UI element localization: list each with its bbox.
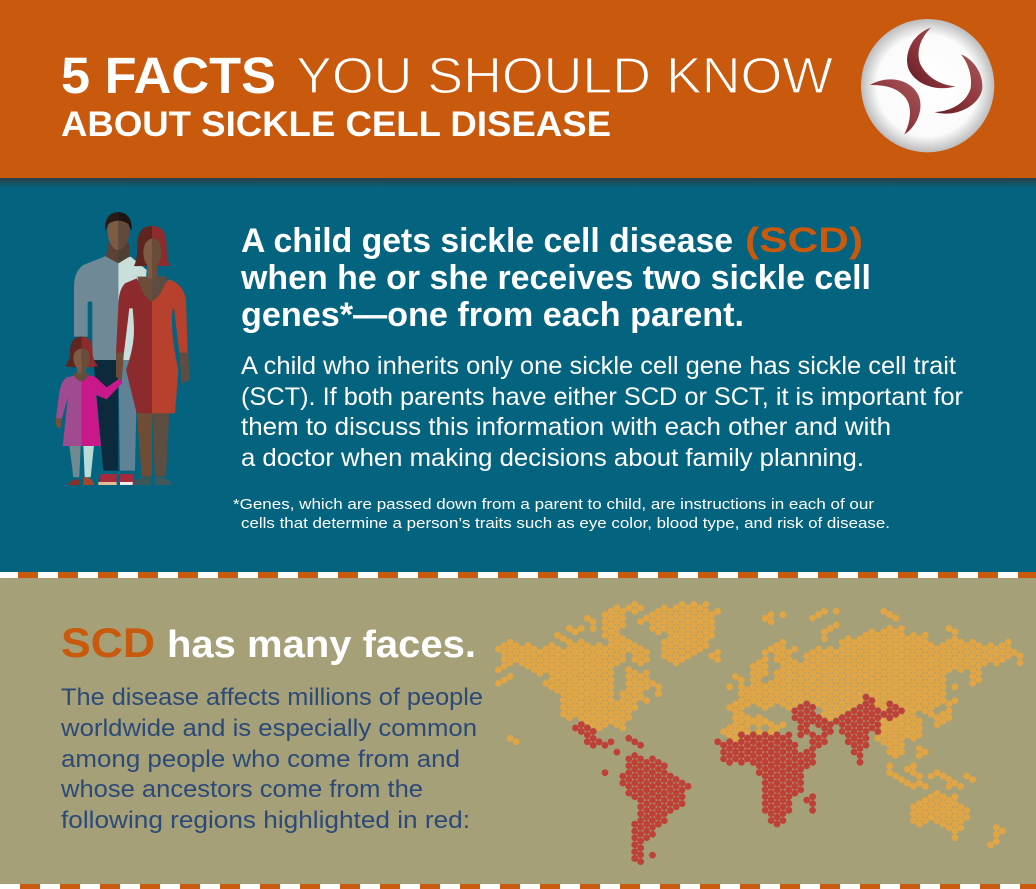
heading: how a child gets SCD: A child gets sickle cell disease — [241, 222, 733, 260]
heading: how a child gets SCD: genes*—one from each parent. — [241, 296, 744, 334]
heading: how a child gets SCD — [240, 221, 871, 334]
man torso — [74, 256, 118, 360]
title: 5 facts you should know: YOU SHOULD KNOW — [296, 47, 833, 104]
heading: SCD has many faces: SCD — [61, 619, 155, 666]
heading: SCD has many faces: has many faces. — [167, 624, 476, 666]
divider: bottom dashed stripe — [0, 884, 1036, 889]
text block: regions description — [60, 684, 483, 834]
footnote: *Genes, which are passed down from a parent to child, are instructions in each of our — [233, 496, 874, 513]
heading: SCD has many faces — [61, 619, 476, 666]
title: 5 facts you should know — [61, 47, 833, 104]
woman legs — [137, 412, 152, 477]
text block: sickle cell trait explanation: a doctor when making decisions about family planning. — [241, 444, 864, 472]
text block: sickle cell trait explanation — [241, 352, 963, 472]
text block: regions description: The disease affects millions of people — [61, 684, 483, 711]
map dots: lower-risk regions — [498, 604, 1020, 845]
child head — [65, 337, 82, 367]
text block: sickle cell trait explanation: A child who inherits only one sickle cell gene has sickle cell trait — [241, 352, 956, 380]
text block: regions description: among people who come from and — [61, 746, 460, 773]
map dots: highlighted regions in red — [575, 697, 902, 862]
illustration: family of three — [55, 212, 189, 485]
woman head — [134, 226, 152, 266]
text block: sickle cell trait explanation: (SCT). If both parents have either SCD or SCT, it is important for — [241, 383, 963, 411]
text block: regions description: whose ancestors come from the — [60, 776, 423, 803]
text block: regions description: following regions highlighted in red: — [61, 807, 470, 834]
title: 5 facts you should know: 5 FACTS — [61, 47, 276, 104]
divider: dashed stripe — [0, 572, 1036, 578]
text block: sickle cell trait explanation: them to discuss this information with each other and with — [241, 413, 891, 441]
man legs — [93, 359, 118, 471]
panel: header banner — [0, 0, 1036, 178]
panel: inheritance fact — [0, 178, 1036, 572]
footnote: cells that determine a person’s traits such as eye color, blood type, and risk of disease. — [241, 515, 890, 532]
footnote — [233, 496, 890, 532]
man head — [108, 217, 118, 250]
child legs — [69, 445, 81, 477]
subtitle: ABOUT SICKLE CELL DISEASE — [61, 105, 611, 144]
text block: regions description: worldwide and is especially common — [60, 715, 477, 742]
woman arms — [116, 352, 124, 382]
man neck — [106, 243, 118, 263]
heading: how a child gets SCD: (SCD) — [745, 221, 863, 260]
woman dress — [116, 278, 152, 413]
panel: SCD has many faces — [0, 578, 1036, 884]
world map: hexagonal dot grid — [498, 604, 1020, 862]
icon: sickle cells in white circle — [861, 19, 994, 152]
child dress — [56, 374, 82, 446]
heading: how a child gets SCD: when he or she receives two sickle cell — [240, 259, 871, 297]
